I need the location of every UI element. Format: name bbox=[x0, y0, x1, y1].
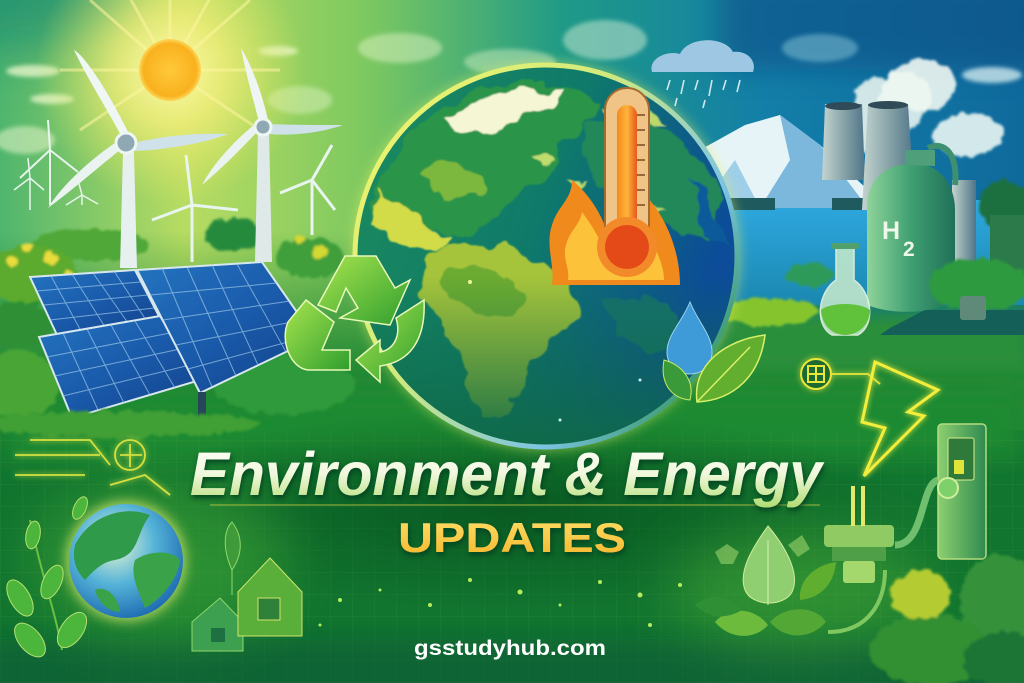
clouds bbox=[0, 20, 1022, 154]
title: Environment & Energy bbox=[190, 440, 825, 508]
panel: lower left bbox=[39, 316, 200, 418]
rain cloud bbox=[651, 40, 754, 108]
flask bbox=[820, 243, 870, 335]
distant wind turbines bbox=[14, 120, 335, 262]
subtitle: UPDATES bbox=[398, 514, 626, 561]
main wind turbine left bbox=[48, 50, 228, 268]
main wind turbine right bbox=[202, 48, 343, 262]
distant tree line bbox=[0, 219, 344, 305]
sun bbox=[35, 0, 305, 205]
panel: top left bbox=[30, 270, 160, 335]
continent: north america bbox=[372, 82, 600, 238]
right foliage bbox=[722, 259, 1024, 368]
website url: gsstudyhub.com bbox=[414, 637, 606, 660]
charging station bbox=[938, 424, 986, 559]
continent: africa and europe bbox=[583, 118, 721, 245]
plant sprig left bbox=[1, 495, 92, 662]
hydrogen tank: H bbox=[882, 217, 900, 245]
lower right circuit and lightning bbox=[801, 359, 938, 476]
foliage behind panels bbox=[0, 301, 355, 419]
houses bbox=[192, 522, 302, 651]
water drop and leaves bbox=[663, 302, 765, 402]
plug and cable bbox=[824, 478, 958, 632]
recycle symbol bbox=[285, 256, 424, 382]
mini globe bbox=[66, 501, 186, 621]
globe bbox=[352, 62, 740, 450]
left infographic doodles bbox=[15, 440, 170, 495]
hydrogen tank bbox=[867, 146, 955, 312]
sparkle dots bbox=[318, 280, 682, 627]
bushes bottom right bbox=[870, 555, 1024, 683]
hydrogen tank: 2 bbox=[903, 238, 915, 261]
solar panels bbox=[30, 262, 315, 426]
continent: south america bbox=[419, 244, 580, 418]
thermometer with flame bbox=[549, 88, 680, 285]
right landscape: mountains, sea, power plant bbox=[700, 61, 1024, 305]
panel: large right bbox=[137, 262, 315, 393]
foreground foliage left bbox=[0, 411, 260, 437]
leaves cluster bottom right bbox=[695, 526, 836, 636]
